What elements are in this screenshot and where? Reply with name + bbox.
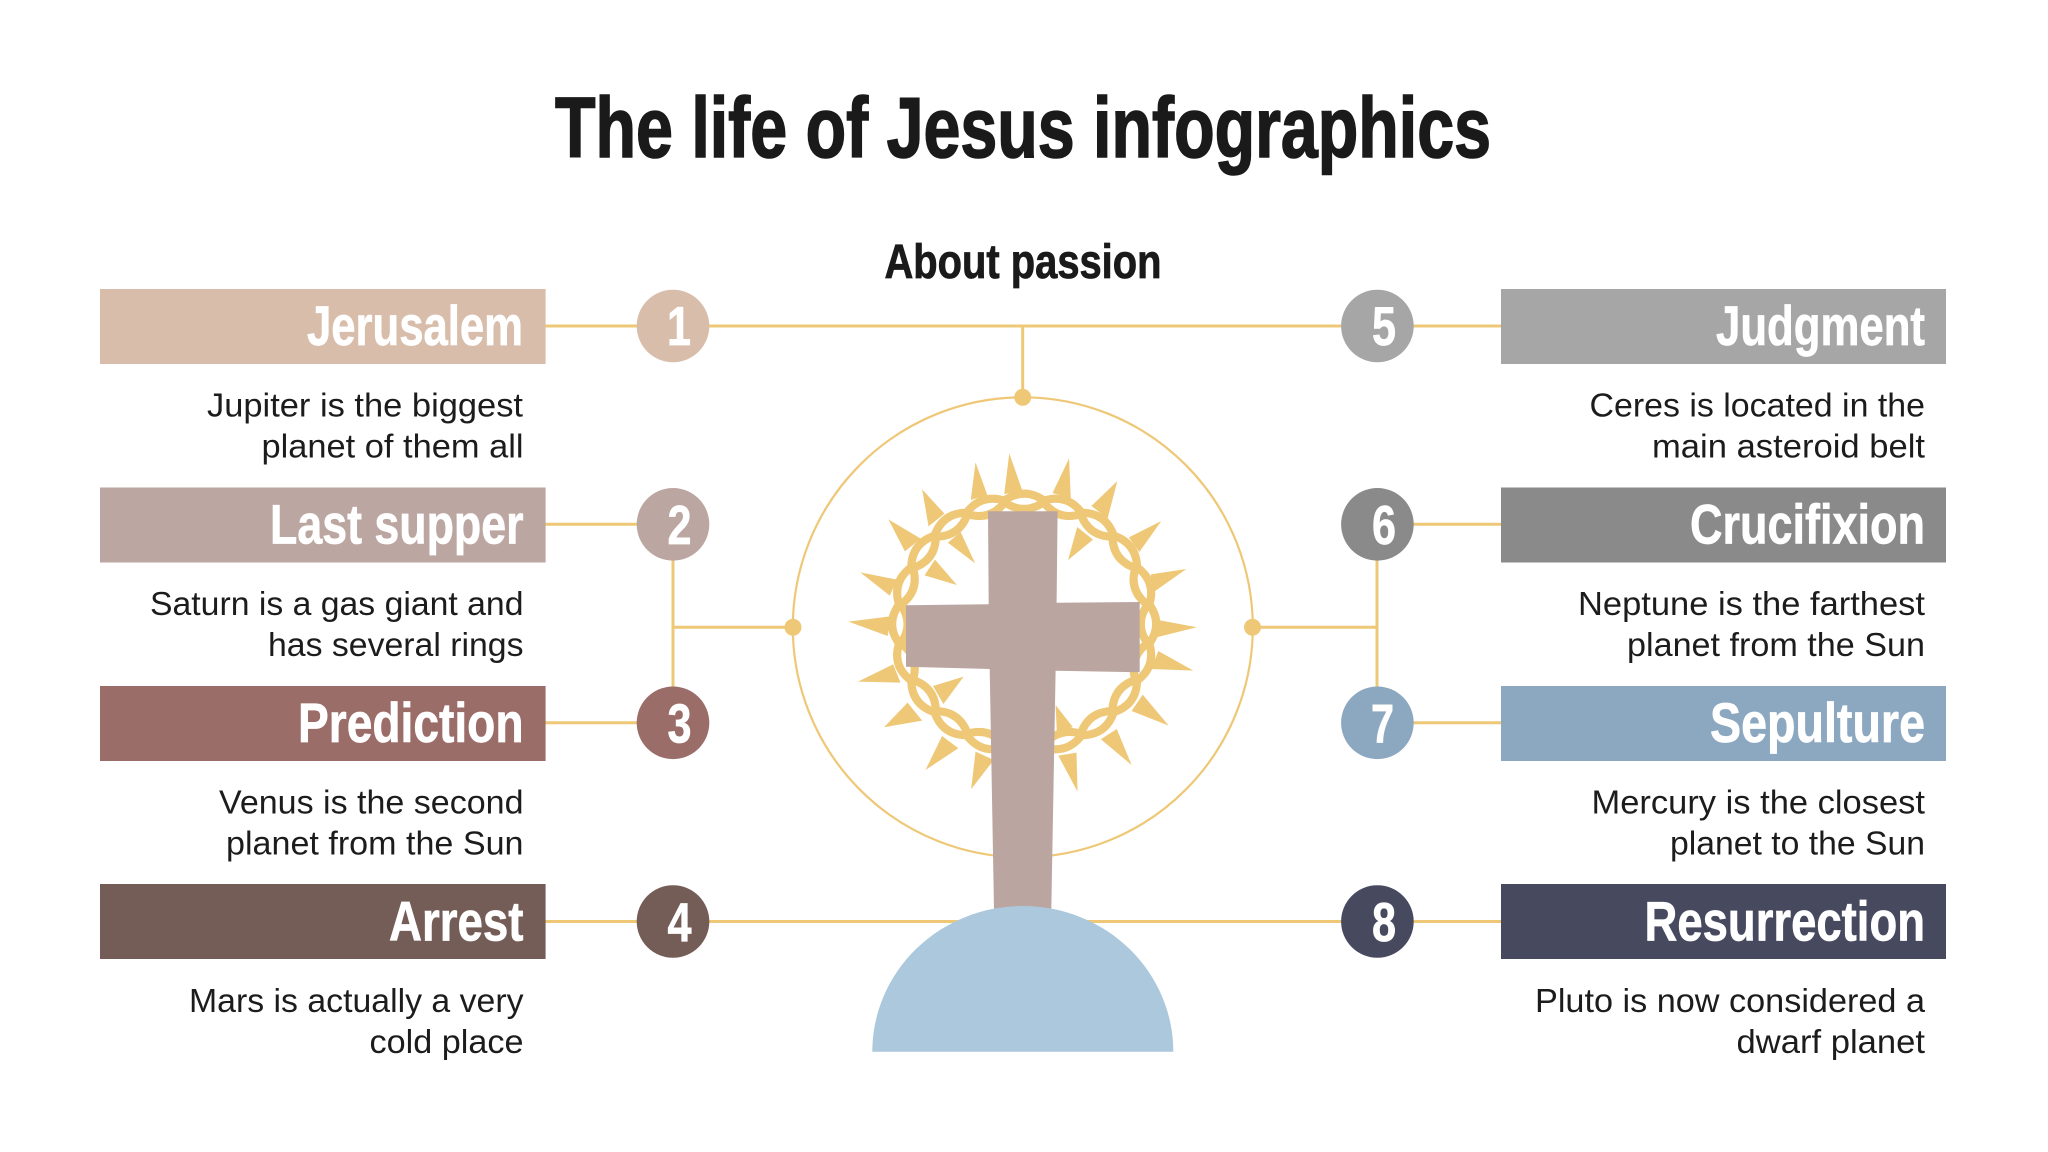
item 7: Sepulture: 7 [1371, 692, 1394, 754]
item 2: Last supper [100, 488, 709, 663]
item 8: Resurrection: Resurrection [1644, 890, 1925, 952]
item 5: Judgment: Judgment [1716, 294, 1925, 357]
crown of thorns [849, 453, 1197, 792]
item 2: Last supper: 2 [668, 494, 692, 556]
item 5: Judgment: 5 [1372, 295, 1396, 357]
connector lines [545, 326, 1501, 922]
item 7: Sepulture: Sepulture [1710, 691, 1925, 754]
item 7: Sepulture: planet to the Sun [1670, 824, 1925, 861]
item 5: Judgment [1341, 289, 1946, 464]
item 6: Crucifixion: planet from the Sun [1627, 626, 1925, 663]
item 8: Resurrection [1341, 884, 1946, 1060]
item 1: Jerusalem: Jerusalem [307, 294, 523, 357]
item 8: Resurrection: 8 [1372, 891, 1396, 953]
hill [872, 906, 1173, 1052]
item 2: Last supper: Last supper [270, 492, 524, 556]
item 4: Arrest [100, 884, 709, 1060]
title: The life of Jesus infographics [555, 81, 1491, 176]
item 1: Jerusalem [100, 289, 709, 464]
item 4: Arrest: Mars is actually a very [189, 982, 524, 1019]
halo circle with connector dots [784, 389, 1261, 857]
item 7: Sepulture [1341, 686, 1946, 861]
item 5: Judgment: main asteroid belt [1652, 427, 1925, 464]
item 4: Arrest: 4 [668, 891, 692, 953]
subtitle: About passion [884, 236, 1162, 289]
item 1: Jerusalem: Jupiter is the biggest [207, 387, 523, 424]
item 6: Crucifixion: 6 [1372, 494, 1396, 556]
item 5: Judgment: Ceres is located in the [1590, 387, 1925, 424]
item 6: Crucifixion: Neptune is the farthest [1578, 585, 1925, 622]
item 7: Sepulture: Mercury is the closest [1592, 784, 1925, 821]
item 1: Jerusalem: planet of them all [262, 427, 524, 464]
item 3: Prediction: planet from the Sun [226, 824, 524, 861]
item 8: Resurrection: dwarf planet [1736, 1023, 1925, 1060]
item 8: Resurrection: Pluto is now considered a [1535, 982, 1926, 1019]
item 3: Prediction [100, 686, 709, 861]
item 4: Arrest: cold place [370, 1023, 524, 1060]
item 6: Crucifixion [1341, 488, 1946, 663]
item 3: Prediction: 3 [668, 692, 692, 754]
item 3: Prediction: Venus is the second [219, 784, 524, 821]
item 2: Last supper: has several rings [268, 626, 524, 663]
item 1: Jerusalem: 1 [667, 295, 691, 357]
item 6: Crucifixion: Crucifixion [1690, 492, 1925, 556]
item 2: Last supper: Saturn is a gas giant and [150, 585, 524, 622]
item 3: Prediction: Prediction [298, 691, 524, 754]
cross [906, 511, 1140, 910]
item 4: Arrest: Arrest [389, 890, 524, 952]
